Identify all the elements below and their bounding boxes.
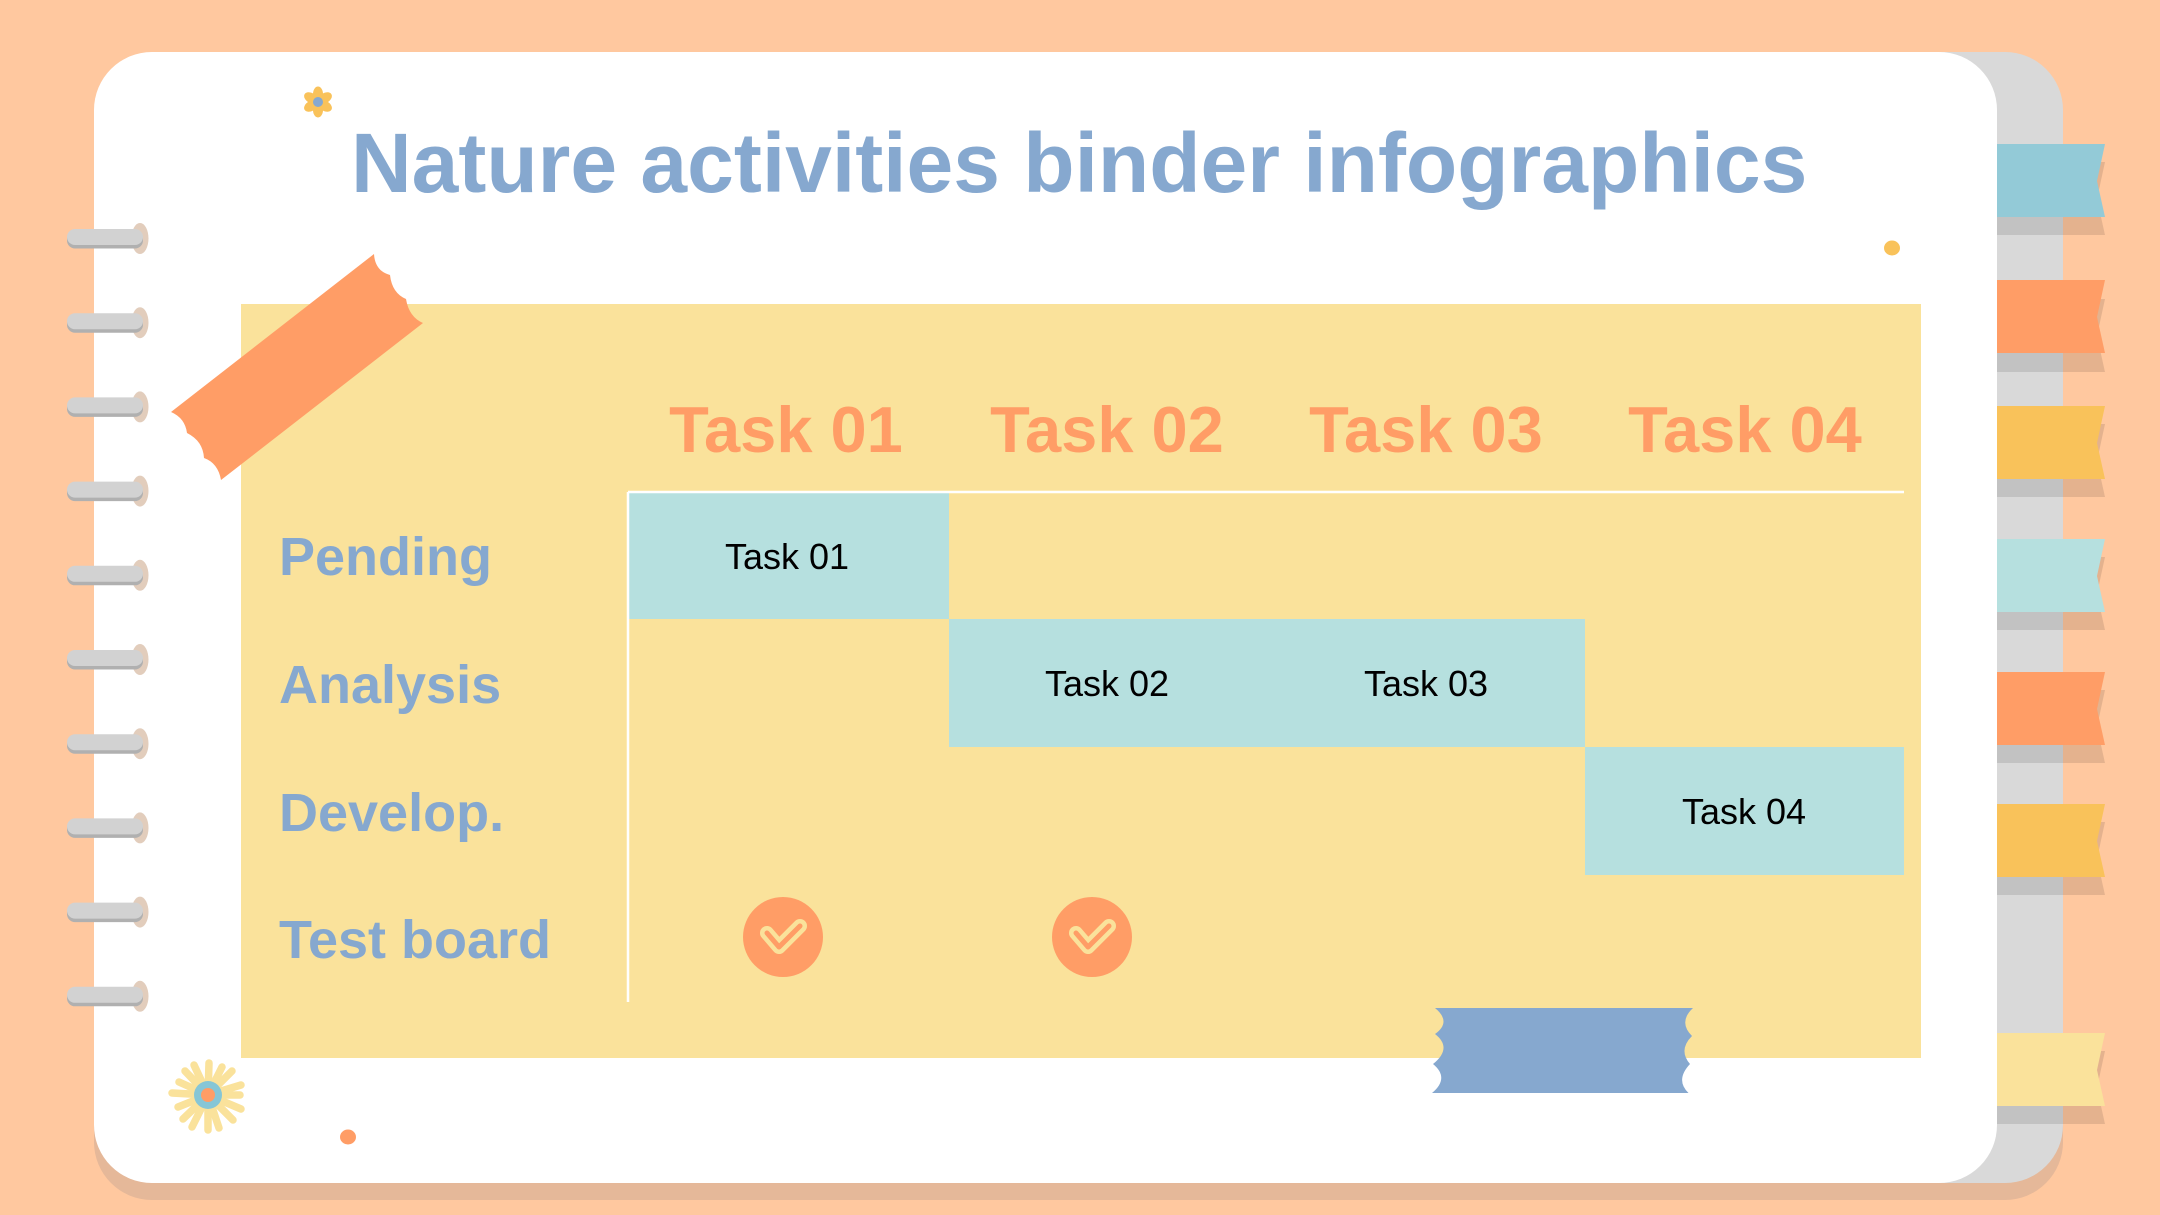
task cell: pending: Task 01 bbox=[725, 536, 849, 577]
task cell: pending bbox=[628, 493, 949, 619]
row labels: Pending bbox=[279, 527, 492, 587]
row labels: Analysis bbox=[279, 655, 501, 715]
row labels bbox=[279, 527, 551, 970]
row labels: Test board bbox=[279, 910, 551, 970]
task cell: develop bbox=[1585, 747, 1904, 875]
column headings bbox=[669, 393, 1862, 466]
binder tabs bbox=[1997, 144, 2105, 1106]
task cell: analysis bbox=[949, 619, 1585, 747]
column headings: Task 04 bbox=[1628, 393, 1862, 466]
icon: sunflower bbox=[172, 1063, 241, 1130]
task cell: analysis: Task 02 bbox=[1045, 663, 1169, 704]
column headings: Task 01 bbox=[669, 393, 903, 466]
task cell: analysis: Task 03 bbox=[1364, 663, 1488, 704]
binder rings bbox=[67, 223, 148, 1012]
task cell: develop: Task 04 bbox=[1682, 791, 1806, 832]
column headings: Task 03 bbox=[1309, 393, 1543, 466]
tape: orange bbox=[171, 254, 423, 480]
tab shadows bbox=[1997, 162, 2105, 1124]
icon: check badge 2 bbox=[1052, 897, 1132, 977]
column headings: Task 02 bbox=[990, 393, 1224, 466]
binder back cover bbox=[1700, 52, 2063, 1183]
dot: top right bbox=[1884, 240, 1900, 256]
icon: check badge 1 bbox=[743, 897, 823, 977]
title: Nature activities binder infographics bbox=[351, 116, 1807, 210]
panel: kanban board background bbox=[241, 304, 1921, 1058]
grid lines bbox=[628, 492, 1904, 1002]
tape: blue bbox=[1432, 1008, 1693, 1093]
dot: bottom left bbox=[340, 1130, 356, 1144]
row labels: Develop. bbox=[279, 783, 504, 843]
icon: small flower bbox=[302, 86, 334, 118]
